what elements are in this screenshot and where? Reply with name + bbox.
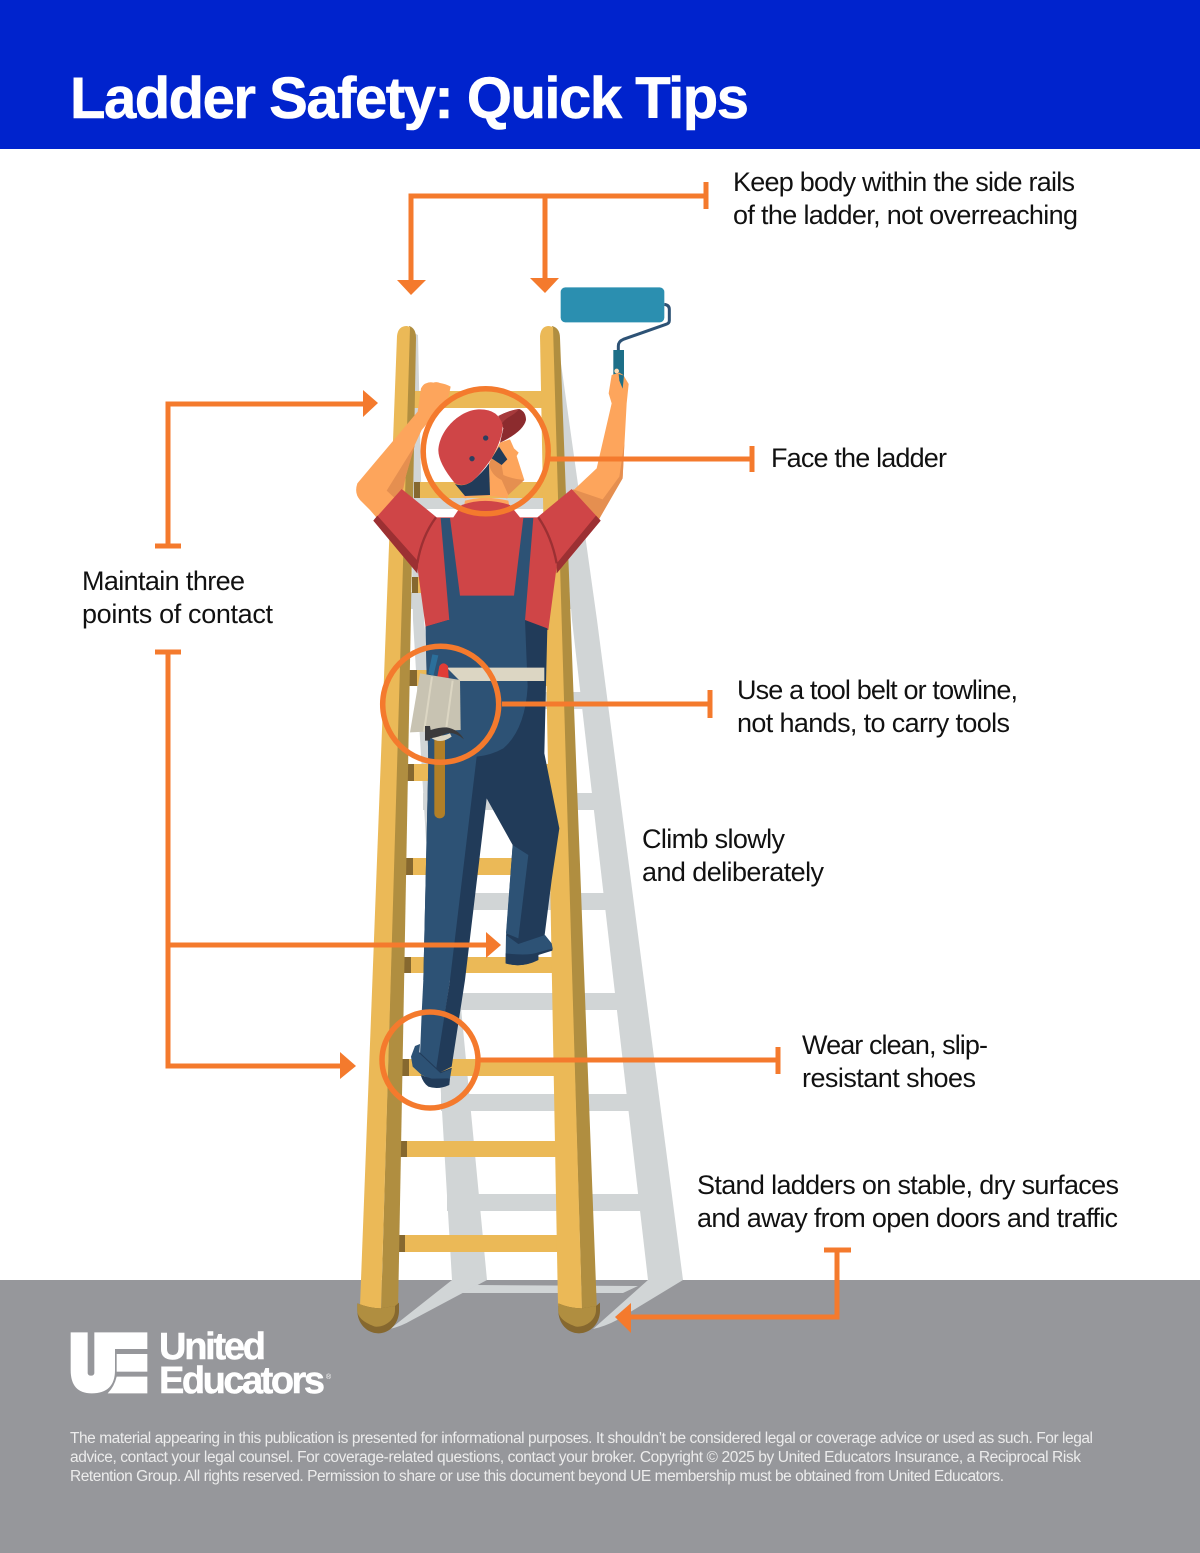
overalls: [423, 620, 559, 980]
face shading: [489, 458, 524, 495]
logo: United Educators: United: [159, 1326, 266, 1368]
tip: climb slowly: Climb slowly: [642, 824, 786, 854]
upper shoe: [506, 935, 553, 965]
torso shirt: [417, 501, 557, 630]
callout: stable dry surfaces: Stand ladders on stable, dry surfaces: [697, 1170, 1119, 1200]
callout: tool belt: [383, 646, 1018, 762]
right rail: [540, 326, 597, 1312]
right sleeve: [537, 489, 601, 573]
ladder rungs: [398, 391, 563, 1252]
ladder: [357, 326, 600, 1333]
worker upper body: [356, 369, 629, 630]
paint roller: [561, 287, 669, 378]
callout: slip-resistant shoes: resistant shoes: [802, 1063, 976, 1093]
callout: stable dry surfaces: and away from open doors and traffic: [697, 1203, 1118, 1233]
raised right arm: [568, 373, 629, 523]
overall straps: [426, 518, 548, 630]
lower leg and shoe: [411, 980, 465, 1088]
ear shadow: [492, 447, 507, 465]
cap visor: [498, 409, 526, 443]
title: Ladder Safety: Quick Tips: [70, 66, 749, 131]
callout: slip-resistant shoes: Wear clean, slip-: [802, 1030, 988, 1060]
face and neck: [460, 439, 524, 498]
callout: keep body within side rails: [397, 167, 1078, 295]
callout: face the ladder: Face the ladder: [771, 443, 947, 473]
callout: slip-resistant shoes: [382, 1012, 988, 1108]
raised left arm: [356, 382, 451, 522]
ladder feet: [357, 1303, 600, 1333]
callout: stable dry surfaces: [615, 1170, 1119, 1333]
worker: [356, 369, 629, 1088]
disclaimer text: The material appearing in this publication is presented for informational purposes. It shouldn’t be considered legal or coverage advice or used as such. For legal: [70, 1430, 1093, 1447]
callout: three points of contact: points of contact: [82, 599, 273, 629]
logo: United Educators: ®: [326, 1373, 332, 1381]
header banner: [0, 0, 1200, 149]
cap dome: [438, 409, 503, 485]
left sleeve: [373, 489, 437, 573]
logo: United Educators: Educators: [159, 1360, 325, 1402]
disclaimer text: [70, 1430, 1093, 1485]
hair: [455, 463, 490, 496]
worker head: [438, 409, 526, 498]
hammer: [434, 735, 445, 818]
disclaimer text: Retention Group. All rights reserved. Permission to share or use this document beyond UE membership must be obtained from United Educators.: [70, 1468, 1004, 1485]
red tool: [437, 663, 449, 678]
tool pouch: [410, 673, 461, 732]
neck base: [463, 498, 510, 510]
callout: face the ladder: [423, 389, 947, 514]
logo mark: [71, 1332, 147, 1393]
ladder shadow: [390, 330, 683, 1329]
worker overalls and tools: [410, 620, 559, 980]
screwdriver: [428, 654, 438, 676]
callout: three points of contact: [82, 390, 501, 1079]
logo: United Educators: [71, 1326, 332, 1402]
disclaimer text: advice, contact your legal counsel. For coverage-related questions, contact your broker. Copyright © 2025 by United Educators Insurance, a Reciprocal Risk: [70, 1449, 1081, 1466]
callout: keep body within side rails: Keep body within the side rails: [733, 167, 1075, 197]
footer floor band: [0, 1280, 1200, 1553]
callout: tool belt: Use a tool belt or towline,: [737, 675, 1018, 705]
tip: climb slowly: and deliberately: [642, 857, 824, 887]
callout: keep body within side rails: of the ladder, not overreaching: [733, 200, 1078, 230]
tool belt: [447, 668, 544, 681]
tip: climb slowly: [642, 824, 824, 887]
left rail: [360, 326, 416, 1312]
callout: three points of contact: Maintain three: [82, 566, 245, 596]
callout: tool belt: not hands, to carry tools: [737, 708, 1010, 738]
